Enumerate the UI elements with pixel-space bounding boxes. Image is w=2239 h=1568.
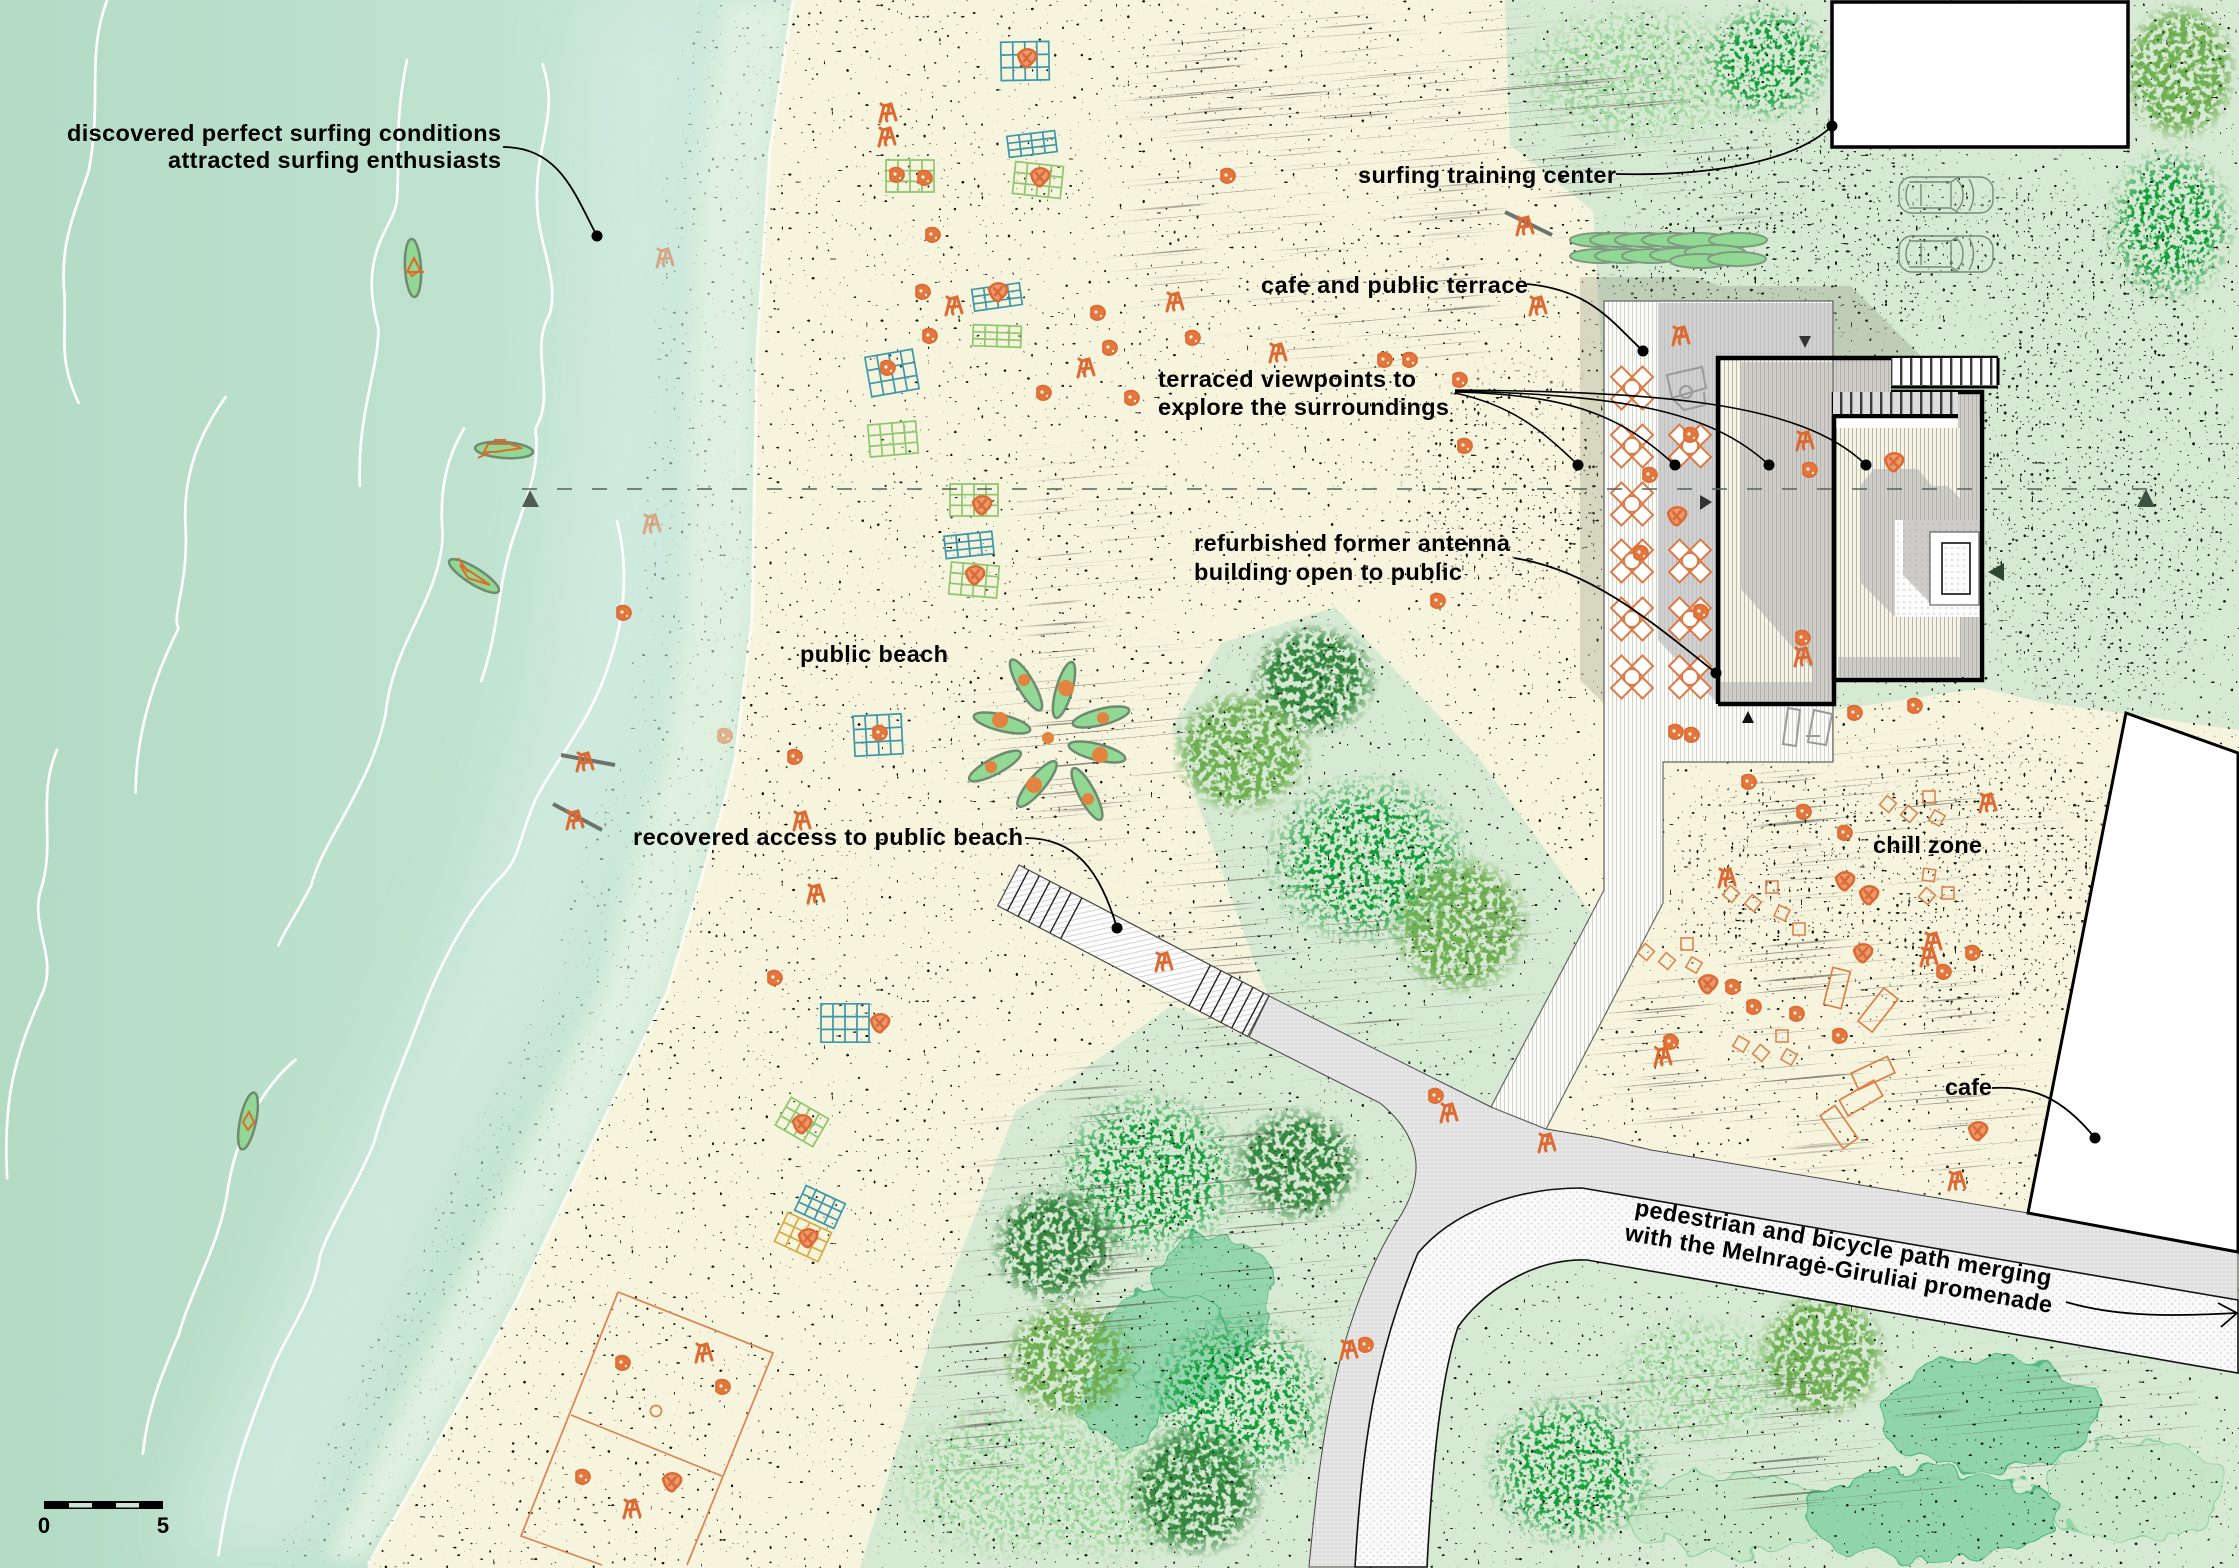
label: refurbished antenna building [1194,530,1722,678]
section marker west [522,490,539,507]
waves [6,0,624,1555]
tree: olive left [1000,1298,1140,1422]
wet sand band [325,0,793,1560]
people [576,49,1996,1518]
tree: hatched teal lower left [1082,1233,1277,1443]
label: surfing conditions: discovered perfect surfing conditions [67,120,501,146]
tree: lower right olive [1754,1289,1890,1421]
paddlers [567,217,1533,829]
tree: top dark green [1700,0,1836,124]
green ground: between path and walkway [1171,607,1600,1107]
tree: rings lower [1140,1310,1340,1490]
paddle boards [553,212,1552,830]
green ground: lower right [1427,1260,2239,1568]
label: recovered access [633,824,1122,934]
label: refurbished antenna building: building open to public [1194,559,1462,585]
cars [1899,177,1993,272]
label: refurbished antenna building: refurbished former antenna [1194,530,1511,556]
tree: pale top [1509,0,1769,150]
tree: dark bottom [1123,1420,1267,1560]
tree canopies [886,0,2239,1567]
surfers on boards in the sea [234,239,533,1151]
scale bar: 0 [38,1513,50,1538]
terrace shaded area [1658,303,1832,704]
tree: middle olive [1170,688,1314,816]
section line [522,488,2150,490]
faint wet sand stipple [274,0,790,1567]
tree: middle rings [1258,770,1478,950]
sand edge highlight [368,1,793,1565]
label: cafe: cafe [1945,1074,1992,1100]
label: recovered access: recovered access to public beach [633,824,1023,850]
label: chill zone: chill zone [1873,832,1982,858]
beach mats [774,41,1064,1262]
chill zone seats [1638,791,1954,1065]
label: surfing training center: surfing training center [1358,162,1616,188]
label: terraced viewpoints: terraced viewpoints to [1158,366,1416,392]
label: public beach: public beach [800,641,948,667]
label: promenade path: pedestrian and bicycle path merging [1633,1194,2054,1291]
pedestrian and bicycle road [1249,996,2238,1567]
tree: dark lower left [1229,1105,1365,1225]
scale bar [38,1501,169,1538]
label: surfing conditions: attracted surfing enthusiasts [168,147,501,173]
label: surfing conditions [67,120,602,242]
chill zone benches [1820,967,1898,1149]
upper stairs [1891,358,1998,387]
dense scattered stones [1396,116,2239,1033]
antenna building: east volume [1833,392,1982,680]
tree: top right olive [2121,0,2239,144]
surfing training center building [1832,2,2128,147]
label: terraced viewpoints [1158,366,1872,470]
tree: rings lower left top [1050,1087,1250,1263]
tree: lower right rings [1480,1388,1660,1552]
tree: right rings [2101,143,2239,307]
surfboard racks [1570,233,1767,268]
tree: middle olive lower [1388,853,1532,997]
grass strokes [898,2,2204,1521]
label: terraced viewpoints: explore the surroundings [1158,394,1449,420]
beach access ramp [998,865,1269,1036]
section marker east [2137,489,2155,507]
label: promenade path: with the Melnragė-Giruliai promenade [1622,1219,2054,1318]
promenade lane [1355,1188,2238,1567]
label: surfing training center [1358,120,1838,188]
green ground: behind building [1505,0,2239,730]
label: cafe and public terrace: cafe and public terrace [1261,272,1528,298]
tree: lower right pale [1600,1310,1800,1450]
label: cafe [1945,1074,2100,1144]
courtyard [1895,520,1979,617]
tree: lower right hatched [1630,1360,2220,1560]
terrace furniture [1667,367,1832,746]
cafe building [2028,713,2238,1252]
scale bar: 5 [157,1513,169,1538]
tree: dark left [988,1183,1124,1307]
tree: pale lower left [886,1394,1146,1566]
antenna building: west volume [1718,358,1998,704]
terrace tables [1611,366,1711,698]
walkway and terrace plaza [1491,301,1833,1129]
beach flower of surfboards [966,656,1131,823]
building cast shadow [1580,277,1960,704]
building section arrows [1700,336,2004,723]
label: promenade path [1622,1194,2237,1327]
green ground: lower left [860,1005,1416,1568]
tree: middle dark [1248,622,1380,738]
label: cafe and public terrace [1261,272,1648,356]
volleyball courts [521,1292,773,1565]
